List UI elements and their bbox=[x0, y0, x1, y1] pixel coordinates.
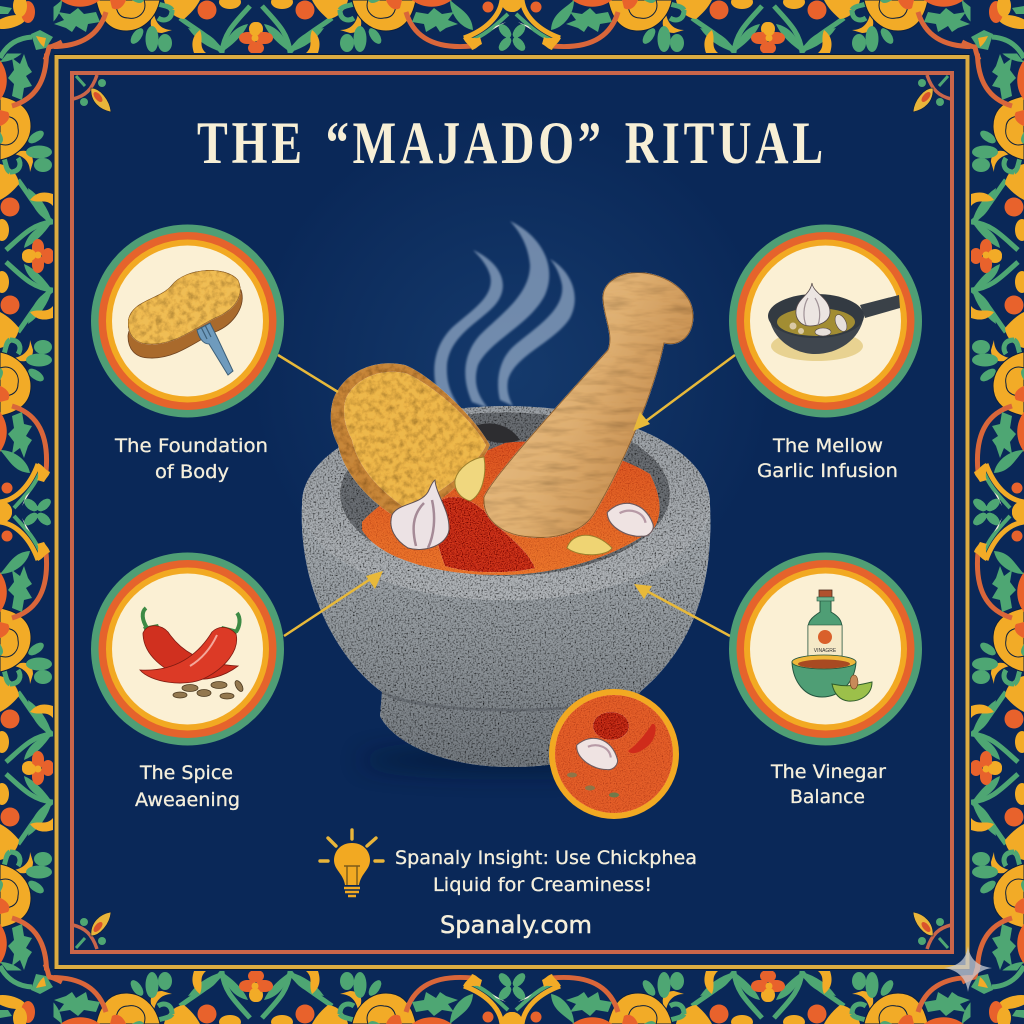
pestle bbox=[484, 273, 693, 538]
corner twig ornaments bbox=[73, 75, 951, 949]
label: the spice aweaening: Aweaening bbox=[135, 789, 240, 811]
label: the mellow garlic infusion: Garlic Infusion bbox=[757, 460, 898, 482]
icon: toast with fork bbox=[128, 270, 242, 375]
mortar body bbox=[302, 505, 710, 767]
website: Spanaly.com bbox=[440, 911, 592, 939]
label: the mellow garlic infusion bbox=[757, 435, 898, 482]
icon: vinegar bottle, bowl and avocado: VINAGRE bbox=[814, 648, 837, 654]
icon: pan with garlic bbox=[768, 283, 900, 361]
circle: the foundation of body bbox=[91, 224, 284, 418]
circle: the mellow garlic infusion bbox=[729, 224, 922, 418]
connector arrows bbox=[278, 355, 735, 636]
badge: spice close-up bbox=[549, 689, 679, 819]
insight callout: Liquid for Creaminess! bbox=[433, 874, 652, 896]
title: THE “MAJADO” RITUAL bbox=[197, 110, 827, 176]
icon: crossed chillies and seeds bbox=[140, 608, 245, 699]
paste speckle bbox=[362, 442, 660, 575]
mortar foot ridge bbox=[382, 692, 640, 710]
dark inner patches bbox=[470, 423, 655, 495]
circle: the spice awakening bbox=[91, 552, 284, 746]
label: the foundation of body: The Foundation bbox=[114, 435, 268, 457]
mortar shadow bbox=[360, 748, 660, 772]
insight callout: Spanaly Insight: Use Chickphea bbox=[395, 847, 697, 869]
clove bottom bbox=[567, 535, 612, 555]
inner panel with double frame bbox=[55, 55, 969, 969]
label: the mellow garlic infusion: The Mellow bbox=[772, 435, 883, 457]
label: the spice aweaening: The Spice bbox=[139, 762, 233, 784]
steam wisps bbox=[434, 221, 575, 408]
mortar and pestle with bread, garlic and paste bbox=[302, 273, 710, 772]
garlic bulb bbox=[391, 480, 449, 549]
label: the vinegar balance: Balance bbox=[790, 786, 865, 808]
label: the vinegar balance bbox=[770, 761, 886, 808]
sparkle watermark bbox=[944, 946, 992, 992]
icon: light bulb bbox=[320, 830, 383, 896]
label: the foundation of body: of Body bbox=[155, 461, 229, 483]
bread slice bbox=[331, 363, 490, 522]
garlic clove yellow bbox=[455, 457, 485, 501]
insight callout bbox=[395, 847, 697, 896]
label: the spice aweaening bbox=[135, 762, 240, 811]
mortar rim bbox=[302, 406, 710, 600]
red spice patch bbox=[435, 497, 535, 572]
circle: the vinegar balance bbox=[729, 552, 922, 746]
label: the foundation of body bbox=[114, 435, 268, 483]
paste bbox=[362, 442, 660, 575]
icon: vinegar bottle, bowl and avocado bbox=[792, 590, 872, 701]
label: the vinegar balance: The Vinegar bbox=[770, 761, 886, 783]
garlic right bbox=[602, 495, 659, 543]
mortar opening bbox=[340, 412, 670, 576]
